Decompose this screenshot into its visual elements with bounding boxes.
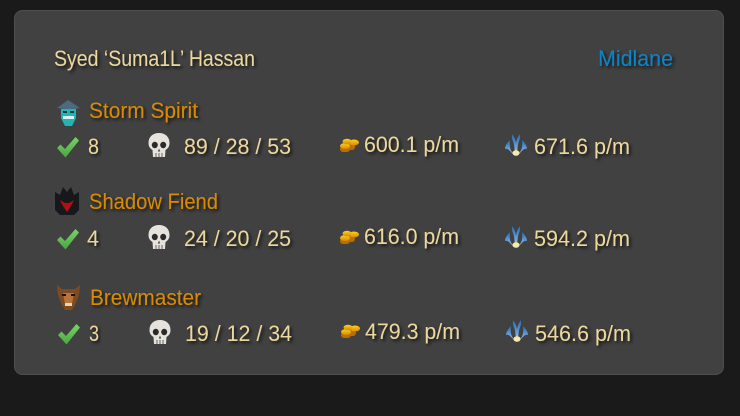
hero name: Brewmaster xyxy=(90,285,201,310)
icon: skull xyxy=(148,133,170,157)
player name: Syed ‘Suma1L’ Hassan xyxy=(54,46,255,71)
kda: 19 / 12 / 34 xyxy=(185,321,292,346)
gold per minute: 479.3 p/m xyxy=(365,319,460,344)
icon: wins check xyxy=(57,137,79,158)
icon: gold xyxy=(340,139,359,152)
role: midlane: Midlane xyxy=(598,46,673,71)
hero name: Storm Spirit xyxy=(89,98,198,123)
experience per minute: 671.6 p/m xyxy=(534,134,630,159)
icon: experience xyxy=(506,320,528,342)
icon: skull xyxy=(148,225,170,249)
icon: experience xyxy=(505,134,527,156)
kda: 89 / 28 / 53 xyxy=(184,134,291,159)
hero row: Brewmaster xyxy=(57,285,631,346)
icon: gold xyxy=(340,231,359,244)
kda: 24 / 20 / 25 xyxy=(184,226,291,251)
gold per minute: 600.1 p/m xyxy=(364,132,459,157)
icon: skull xyxy=(150,320,170,344)
hero row: Shadow Fiend xyxy=(55,187,630,251)
icon: gold xyxy=(341,325,360,338)
experience per minute: 546.6 p/m xyxy=(535,321,631,346)
wins: 3 xyxy=(89,321,99,346)
wins: 4 xyxy=(87,226,99,251)
gold per minute: 616.0 p/m xyxy=(364,224,459,249)
wins: 8 xyxy=(88,134,99,159)
experience per minute: 594.2 p/m xyxy=(534,226,630,251)
icon: wins check xyxy=(58,324,80,344)
icon: experience xyxy=(505,226,527,248)
icon: Storm Spirit xyxy=(57,100,80,126)
hero name: Shadow Fiend xyxy=(89,189,218,214)
icon: Shadow Fiend xyxy=(55,187,79,215)
icon: wins check xyxy=(57,229,79,250)
icon: Brewmaster xyxy=(57,285,80,310)
hero row: Storm Spirit xyxy=(57,98,630,159)
